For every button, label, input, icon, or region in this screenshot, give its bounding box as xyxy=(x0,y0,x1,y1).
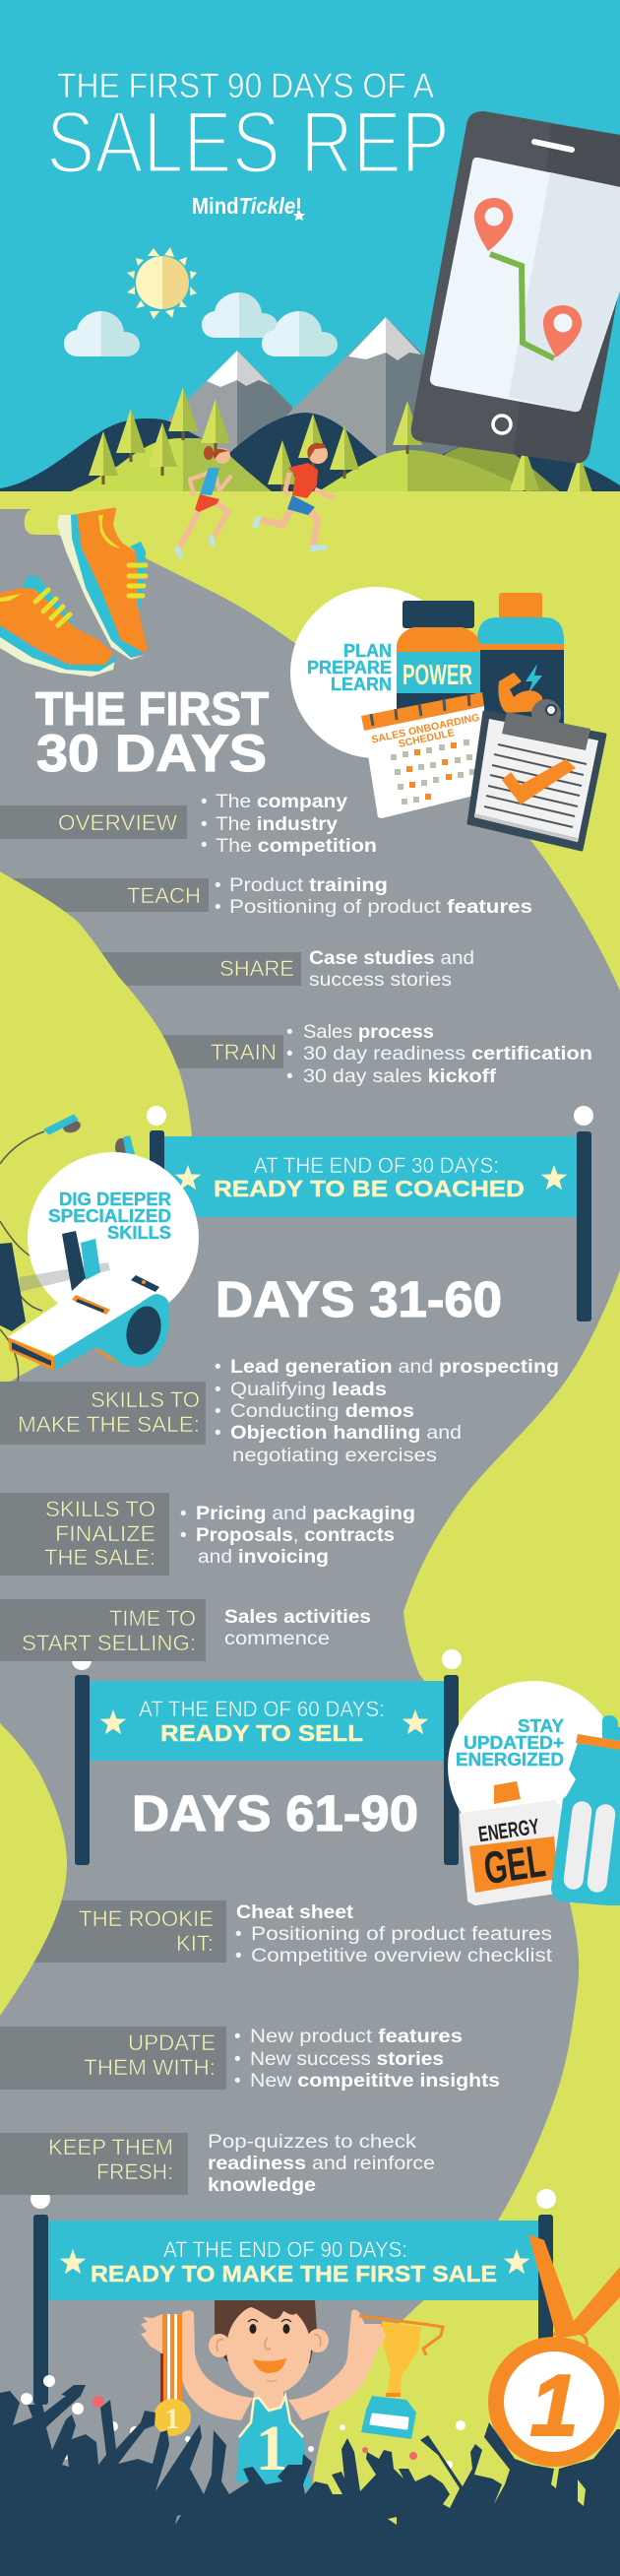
clouds xyxy=(64,292,338,356)
panel: update them with: • xyxy=(234,2071,241,2092)
icon: power bottle: POWER xyxy=(403,660,472,691)
icon: small gold medal with hand xyxy=(141,2314,191,2436)
icon: running shoes xyxy=(0,508,148,676)
panel: share xyxy=(101,950,473,986)
panel: overview: The company xyxy=(216,792,347,812)
panel: the rookie kit: Cheat sheet xyxy=(236,1902,354,1923)
panel: train: Sales process xyxy=(303,1022,434,1043)
icon: power bottle xyxy=(397,601,480,717)
panel: keep them fresh: readiness and reinforce xyxy=(208,2154,435,2174)
panel: teach: Positioning of product features xyxy=(229,897,532,918)
confetti xyxy=(21,2375,465,2469)
title xyxy=(46,67,450,191)
panel: update them with: • xyxy=(234,2049,241,2070)
panel: skills to finalize the sale: FINALIZE xyxy=(55,1521,155,1546)
panel: time to start selling: TIME TO xyxy=(109,1606,196,1631)
panel: train: TRAIN xyxy=(211,1040,277,1064)
icon: big first place medal xyxy=(488,2234,620,2467)
panel: skills to make the sale: • xyxy=(215,1423,221,1444)
panel: overview xyxy=(0,792,377,857)
panel: train: • xyxy=(286,1066,293,1087)
icon: water bottle xyxy=(551,1715,620,1905)
panel: plan prepare learn badge xyxy=(290,587,462,758)
panel: teach: • xyxy=(215,897,221,918)
icon: gold trophy xyxy=(351,2316,443,2439)
icon: big first place medal: 1 xyxy=(530,2356,578,2454)
icon: energy gel packet xyxy=(462,1781,563,1903)
icon: sales onboarding schedule calendar xyxy=(361,692,486,818)
icon: clipboard with checkmark xyxy=(468,699,605,850)
panel: keep them fresh: FRESH: xyxy=(96,2159,173,2184)
icon: sales onboarding schedule calendar: SCHEDULE xyxy=(398,727,456,750)
panel: update them with: THEM WITH: xyxy=(84,2055,216,2080)
panel: the rookie kit: Competitive overview checklist xyxy=(251,1946,553,1966)
boy with raised arms xyxy=(182,2300,377,2488)
callout: stay updated: STAY xyxy=(518,1716,564,1736)
panel: skills to finalize the sale: SKILLS TO xyxy=(45,1497,155,1521)
panel: train: 30 day readiness certification xyxy=(303,1044,592,1064)
banner: end of 90 days: READY TO MAKE THE FIRST SALE xyxy=(91,2261,497,2286)
panel: teach xyxy=(0,875,532,918)
panel: the rookie kit: • xyxy=(235,1924,242,1945)
banner: end of 60 days: READY TO SELL xyxy=(160,1720,363,1746)
panel: skills to make the sale: • xyxy=(215,1357,221,1378)
panel: overview: • xyxy=(201,835,208,856)
panel: skills to finalize the sale: Pricing and packaging xyxy=(196,1504,415,1524)
panel: share: SHARE xyxy=(219,956,294,981)
banner: end of 60 days: AT THE END OF 60 DAYS: xyxy=(139,1697,385,1721)
panel: teach: • xyxy=(215,875,221,896)
icon: sun xyxy=(127,247,197,319)
crowd silhouette xyxy=(0,2385,620,2576)
panel: skills to finalize the sale: and invoicing xyxy=(198,1547,329,1568)
panel: update them with: • xyxy=(234,2027,241,2047)
panel: skills to finalize the sale: • xyxy=(180,1525,187,1546)
icon: runner woman xyxy=(174,446,231,559)
panel: time to start selling: START SELLING: xyxy=(22,1631,196,1655)
panel: the rookie kit: KIT: xyxy=(176,1931,214,1956)
panel: skills to finalize the sale: Proposals , contracts xyxy=(196,1525,395,1546)
panel: skills to make the sale: MAKE THE SALE: xyxy=(18,1412,200,1437)
panel: skills to finalize the sale: • xyxy=(180,1504,187,1524)
logo: MindTickle: MindTickle! xyxy=(192,193,302,219)
panel: share: success stories xyxy=(309,970,452,991)
banner: end of 30 days: READY TO BE COACHED xyxy=(214,1176,525,1201)
icon: coach whistle xyxy=(0,1231,169,1371)
panel: train: 30 day sales kickoff xyxy=(303,1066,497,1087)
banner: end of 30 days xyxy=(147,1106,593,1321)
callout: stay updated: ENERGIZED xyxy=(456,1750,564,1770)
panel: skills to finalize the sale xyxy=(0,1493,415,1576)
icon: energy gel packet: ENERGY xyxy=(477,1814,541,1846)
panel: train xyxy=(162,1024,591,1086)
icon: phone with map route xyxy=(411,111,620,463)
panel: skills to make the sale: • xyxy=(215,1401,221,1422)
panel: overview: The industry xyxy=(216,814,338,835)
icon: energy bottle xyxy=(477,593,564,748)
callout: dig deeper: SKILLS xyxy=(107,1223,171,1243)
icon: sales onboarding schedule calendar: SALES ONBOARDING xyxy=(370,712,480,746)
callout: dig deeper: SPECIALIZED xyxy=(48,1206,171,1226)
panel: skills to make the sale: SKILLS TO xyxy=(91,1387,200,1412)
panel: teach: Product training xyxy=(229,875,388,896)
panel: overview: • xyxy=(201,792,208,812)
heading: the first 30 days xyxy=(35,682,269,783)
panel: keep them fresh xyxy=(0,2132,435,2196)
panel: skills to make the sale: • xyxy=(215,1380,221,1400)
panel: overview: • xyxy=(201,814,208,835)
sky background xyxy=(0,0,620,492)
banner: end of 30 days: AT THE END OF 30 DAYS: xyxy=(254,1153,499,1178)
banner: end of 90 days xyxy=(31,2189,556,2405)
panel: share: Case studies and xyxy=(309,948,474,969)
panel: time to start selling xyxy=(0,1599,371,1661)
callout: plan prepare learn xyxy=(307,641,392,694)
heading: the first 30 days: THE FIRST xyxy=(35,682,269,735)
panel: skills to make the sale: Conducting demos xyxy=(230,1401,414,1422)
icon: earphones xyxy=(0,1115,135,1382)
panel: keep them fresh: Pop-quizzes to check xyxy=(208,2132,417,2153)
title: THE FIRST 90 DAYS OF A xyxy=(57,67,435,105)
panel: update them with: New product features xyxy=(250,2027,463,2047)
callout: plan prepare learn: PREPARE xyxy=(307,658,392,677)
panel: update them with: UPDATE xyxy=(128,2030,216,2055)
boy with raised arms: 1 xyxy=(256,2413,287,2484)
panel: the rookie kit: • xyxy=(235,1946,242,1966)
panel: teach: TEACH xyxy=(127,883,201,908)
panel: skills to make the sale: Lead generation and prospecting xyxy=(230,1357,559,1378)
panel: keep them fresh: KEEP THEM xyxy=(48,2135,173,2159)
panel: update them with: New success stories xyxy=(250,2049,444,2070)
panel: keep them fresh: knowledge xyxy=(208,2175,316,2196)
panel: the rookie kit xyxy=(0,1900,553,1966)
banner: end of 60 days xyxy=(72,1649,462,1865)
panel: the rookie kit: THE ROOKIE xyxy=(79,1906,214,1931)
panel: skills to finalize the sale: THE SALE: xyxy=(44,1545,155,1570)
panel: update them with xyxy=(0,2027,500,2092)
panel: skills to make the sale: negotiating exercises xyxy=(232,1446,437,1466)
callout: dig deeper xyxy=(48,1190,171,1243)
panel: stay updated energized badge xyxy=(448,1681,619,1852)
callout: dig deeper: DIG DEEPER xyxy=(59,1190,171,1209)
panel: skills to make the sale: Qualifying leads xyxy=(230,1380,387,1400)
panel: train: • xyxy=(286,1044,293,1064)
heading: days 31-60: DAYS 31-60 xyxy=(216,1271,502,1327)
panel: update them with: New compeititve insights xyxy=(250,2071,500,2092)
mountains xyxy=(118,317,463,492)
hills and trees xyxy=(0,387,620,507)
icon: energy gel packet: GEL xyxy=(480,1835,548,1894)
callout: plan prepare learn: PLAN xyxy=(343,641,392,661)
icon: small gold medal with hand: 1 xyxy=(165,2403,179,2435)
panel: time to start selling: Sales activities xyxy=(224,1607,371,1628)
panel: dig deeper specialized skills badge xyxy=(28,1152,199,1323)
heading: the first 30 days: 30 DAYS xyxy=(36,725,267,783)
title: SALES REP xyxy=(46,93,450,191)
callout: plan prepare learn: LEARN xyxy=(331,675,392,694)
icon: runner man xyxy=(252,443,335,551)
panel: skills to make the sale xyxy=(0,1357,559,1466)
panel: train: • xyxy=(286,1022,293,1043)
callout: stay updated: UPDATED+ xyxy=(464,1733,564,1753)
banner: end of 90 days: AT THE END OF 90 DAYS: xyxy=(163,2237,407,2262)
panel: skills to make the sale: Objection handling and xyxy=(230,1423,462,1444)
callout: stay updated xyxy=(456,1716,564,1770)
panel: overview: OVERVIEW xyxy=(58,810,177,835)
heading: days 61-90: DAYS 61-90 xyxy=(132,1785,418,1841)
panel: the rookie kit: Positioning of product features xyxy=(251,1924,552,1945)
panel: time to start selling: commence xyxy=(224,1629,330,1649)
panel: overview: The competition xyxy=(216,836,377,857)
